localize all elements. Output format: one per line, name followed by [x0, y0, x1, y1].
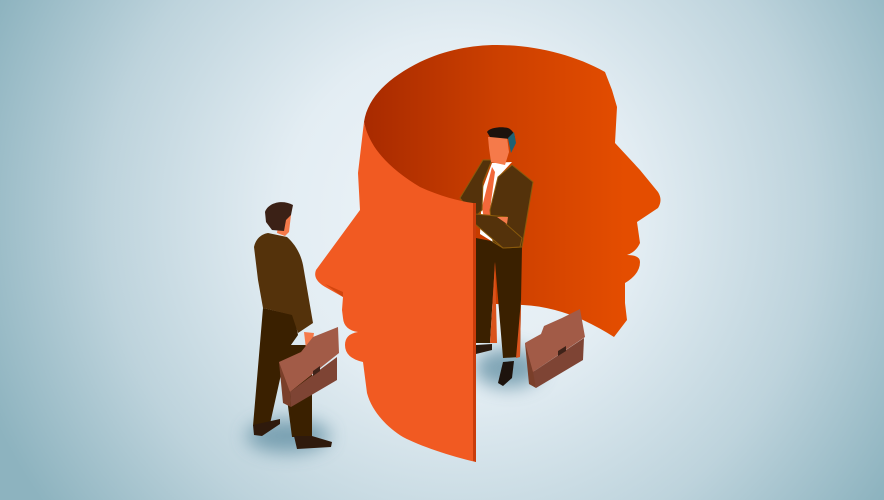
- head: front surface: [315, 122, 476, 462]
- man outside head: [253, 202, 332, 449]
- panel edge: [473, 203, 476, 462]
- briefcase: inner: [525, 309, 585, 388]
- briefcase: outer: [279, 327, 339, 407]
- jacket: [460, 160, 533, 248]
- hand: [497, 217, 508, 224]
- man inside head: [460, 127, 533, 386]
- shoes: [253, 419, 280, 436]
- legs: [476, 238, 522, 358]
- hair: [265, 202, 293, 231]
- crossed arm: [475, 214, 522, 248]
- shadow: outer man: [246, 419, 330, 453]
- hand: [304, 332, 314, 349]
- face: [488, 137, 509, 165]
- shadow: inner man: [474, 348, 542, 388]
- jacket: [254, 233, 313, 333]
- tie: [482, 167, 495, 232]
- hair: [487, 127, 515, 143]
- shirt: [480, 162, 512, 242]
- face: [277, 215, 291, 236]
- shoes: [476, 344, 492, 354]
- head: inner back surface: [364, 45, 660, 337]
- legs: [253, 308, 298, 426]
- nose crease: [325, 284, 343, 297]
